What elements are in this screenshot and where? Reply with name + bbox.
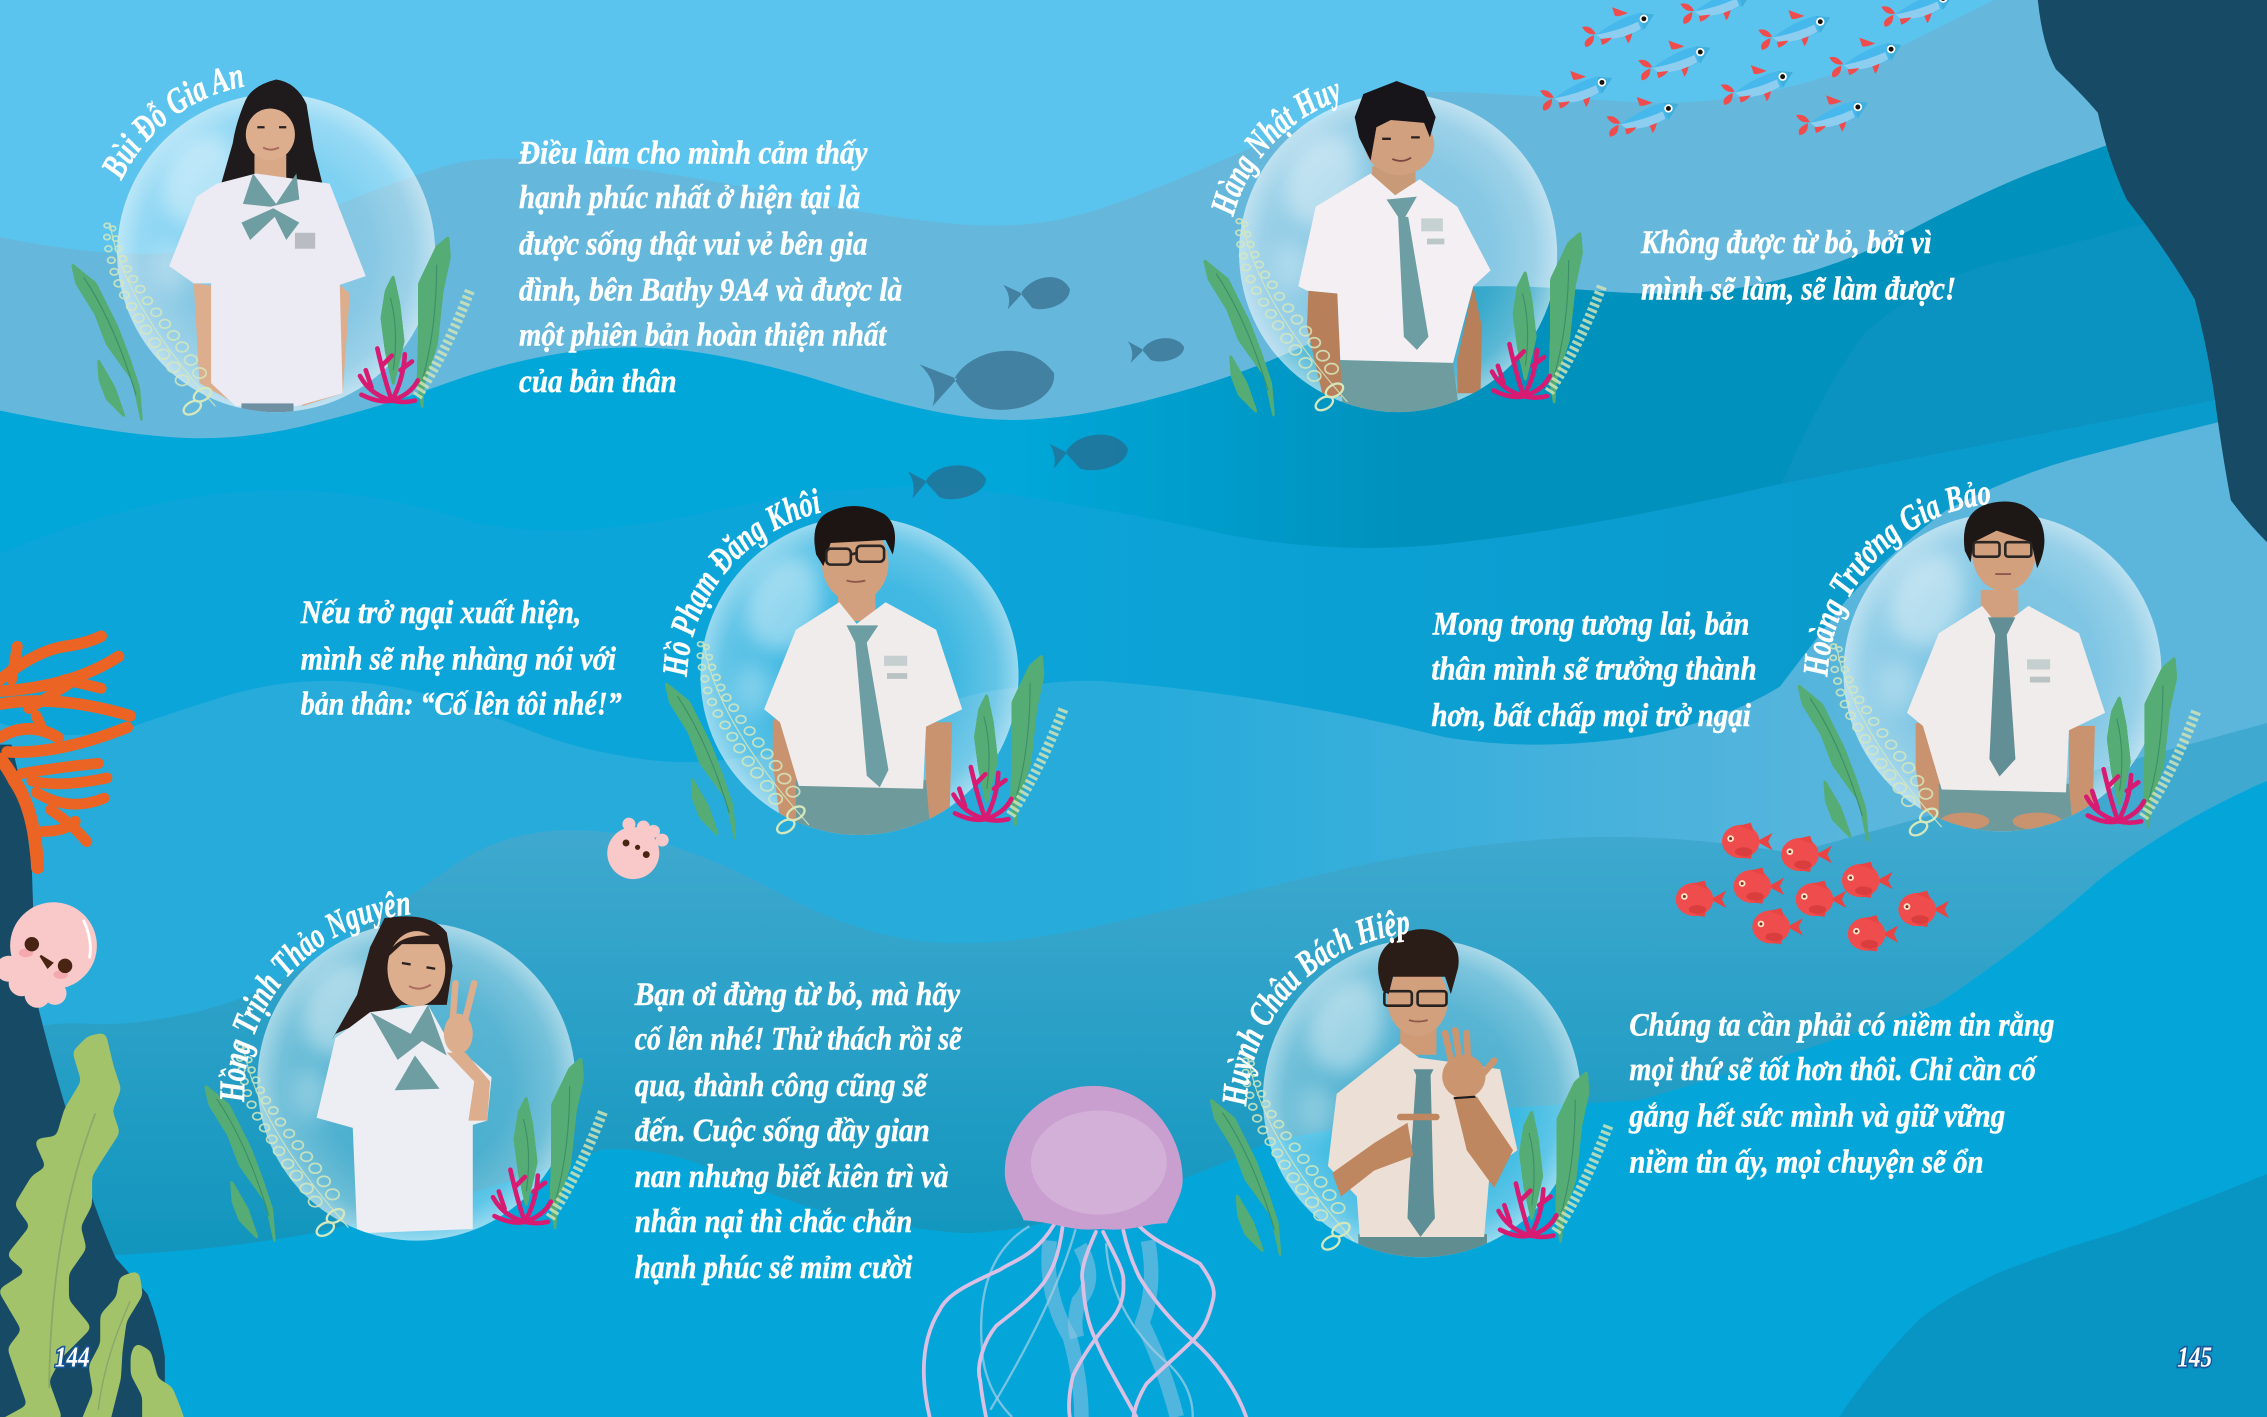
text block: quote Hồ Phạm Đăng Khôi: mình sẽ nhẹ nhàng nói với: [301, 640, 617, 677]
icon: jellyfish: [924, 1086, 1246, 1417]
icon: red fish school: [1676, 823, 1949, 951]
text block: quote Hàng Nhật Huy: mình sẽ làm, sẽ làm được!: [1641, 270, 1956, 307]
panel: Hàng Nhật Huy portrait: [1204, 81, 1602, 419]
photo: student girl with peace sign: [317, 916, 492, 1233]
text block: quote Bùi Đỗ Gia An: một phiên bản hoàn thiện nhất: [519, 317, 888, 354]
name: Hàng Nhật Huy: Hàng Nhật Huy: [1211, 83, 1338, 218]
icon: pink octopus large: [0, 902, 97, 1008]
text block: quote Huỳnh Châu Bách Hiệp: gắng hết sức mình và giữ vững: [1629, 1097, 2005, 1134]
rock: left cliff: [0, 745, 165, 1417]
text block: quote Hồng Trịnh Thảo Nguyên: [634, 976, 962, 1286]
text block: quote Bùi Đỗ Gia An: Điều làm cho mình cảm thấy: [518, 134, 868, 171]
name: Hoàng Trương Gia Bảo: Hoàng Trương Gia Bảo: [1804, 482, 1990, 678]
icon: dark fish school: [908, 277, 1184, 499]
text block: quote Huỳnh Châu Bách Hiệp: mọi thứ sẽ tốt hơn thôi. Chỉ cần cố: [1629, 1051, 2038, 1088]
text block: quote Hoàng Trương Gia Bảo: [1431, 606, 1757, 734]
icon: pink octopus small: [607, 818, 669, 879]
text block: quote Hàng Nhật Huy: [1640, 224, 1956, 307]
text block: quote Hồ Phạm Đăng Khôi: Nếu trở ngại xuất hiện,: [300, 594, 581, 631]
panel: Hoàng Trương Gia Bảo portrait: [1799, 502, 2196, 853]
icon: green seaweed bottom left: [0, 1037, 182, 1417]
panel: Huỳnh Châu Bách Hiệp portrait: [1211, 929, 1608, 1263]
name: Hồ Phạm Đăng Khôi: Hồ Phạm Đăng Khôi: [662, 488, 821, 678]
text block: quote Huỳnh Châu Bách Hiệp: Chúng ta cần phải có niềm tin rằng: [1629, 1006, 2054, 1043]
text block: quote Hồng Trịnh Thảo Nguyên: Bạn ơi đừng từ bỏ, mà hãy: [634, 976, 960, 1013]
icon: orange coral: [0, 636, 130, 868]
page number: 145: 145: [2177, 1341, 2212, 1373]
text block: quote Hồ Phạm Đăng Khôi: bản thân: “Cố lên tôi nhé!”: [301, 685, 622, 722]
icon: blue and red fish school top: [1541, 0, 1953, 136]
text block: quote Hồng Trịnh Thảo Nguyên: hạnh phúc sẽ mỉm cười: [635, 1249, 913, 1286]
text block: quote Hồng Trịnh Thảo Nguyên: nan nhưng biết kiên trì và: [635, 1158, 948, 1195]
panel: Bùi Đỗ Gia An portrait: [72, 80, 470, 421]
photo: student boy with glasses: [764, 506, 962, 849]
text block: quote Hàng Nhật Huy: Không được từ bỏ, bởi vì: [1640, 224, 1932, 261]
text block: quote Hồng Trịnh Thảo Nguyên: nhẫn nại thì chắc chắn: [635, 1203, 912, 1240]
panel: Hồng Trịnh Thảo Nguyên portrait: [205, 916, 603, 1242]
rock: right cliff: [2037, 0, 2267, 542]
text block: quote Hồng Trịnh Thảo Nguyên: đến. Cuộc sống đầy gian: [635, 1112, 930, 1149]
text block: quote Hoàng Trương Gia Bảo: thân mình sẽ trưởng thành: [1431, 651, 1757, 688]
text block: quote Huỳnh Châu Bách Hiệp: niềm tin ấy, mọi chuyện sẽ ổn: [1629, 1144, 1984, 1181]
name: Hồng Trịnh Thảo Nguyên: Hồng Trịnh Thảo Nguyên: [218, 890, 410, 1102]
photo: student girl: [169, 80, 366, 412]
text block: quote Bùi Đỗ Gia An: đình, bên Bathy 9A4 và được là: [519, 272, 902, 309]
name: Huỳnh Châu Bách Hiệp: Huỳnh Châu Bách Hiệp: [1222, 910, 1409, 1107]
text block: quote Bùi Đỗ Gia An: hạnh phúc nhất ở hiện tại là: [519, 179, 860, 216]
text block: quote Hoàng Trương Gia Bảo: Mong trong tương lai, bản: [1432, 606, 1749, 643]
photo: student boy with glasses: [1907, 502, 2105, 853]
text block: quote Bùi Đỗ Gia An: của bản thân: [519, 363, 677, 400]
photo: student boy: [1298, 81, 1491, 419]
text block: quote Bùi Đỗ Gia An: [518, 134, 902, 400]
panel: Hồ Phạm Đăng Khôi portrait: [666, 506, 1063, 849]
text block: quote Hồ Phạm Đăng Khôi: [300, 594, 622, 722]
name: Bùi Đỗ Gia An: Bùi Đỗ Gia An: [102, 68, 244, 182]
page number: 144: 144: [55, 1341, 90, 1373]
text block: quote Huỳnh Châu Bách Hiệp: [1629, 1006, 2054, 1181]
text block: quote Bùi Đỗ Gia An: được sống thật vui vẻ bên gia: [519, 225, 867, 262]
text block: quote Hoàng Trương Gia Bảo: hơn, bất chấp mọi trở ngại: [1431, 697, 1752, 734]
text block: quote Hồng Trịnh Thảo Nguyên: cố lên nhé! Thử thách rồi sẽ: [635, 1021, 962, 1058]
text block: quote Hồng Trịnh Thảo Nguyên: qua, thành công cũng sẽ: [635, 1067, 928, 1104]
photo: student boy pointing: [1328, 929, 1517, 1263]
